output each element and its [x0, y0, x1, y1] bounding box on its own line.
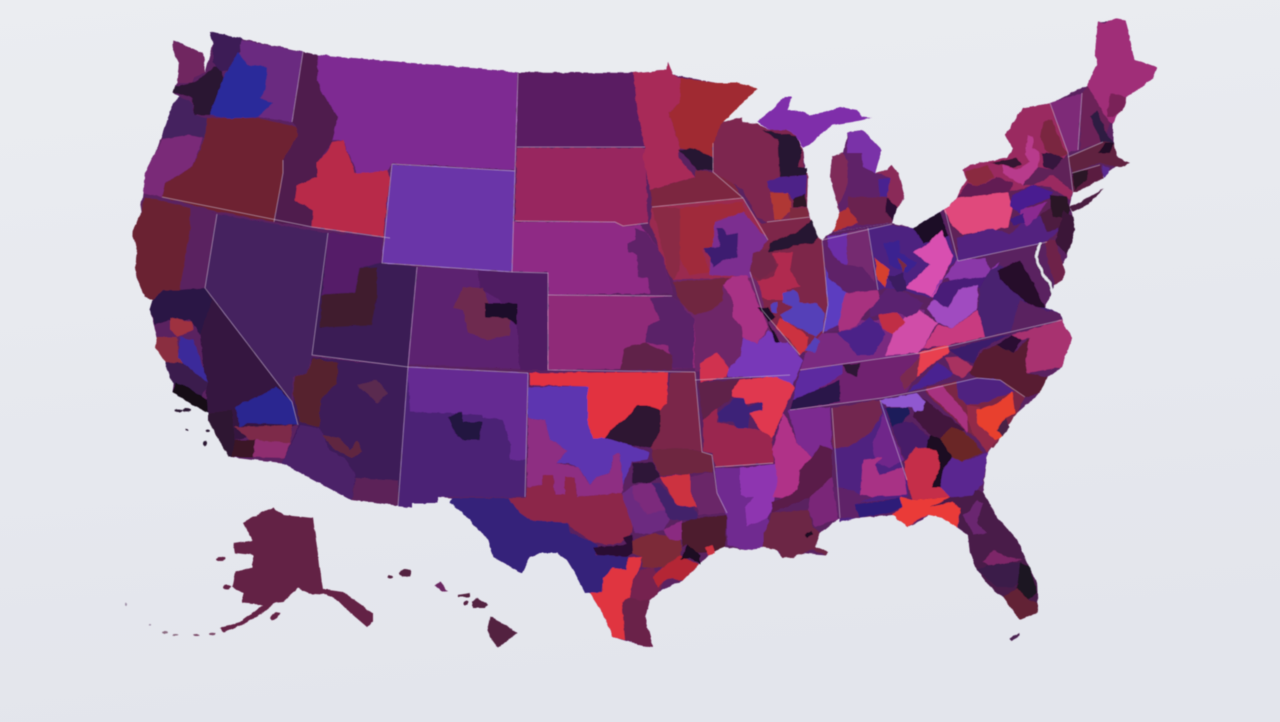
state borders [162, 52, 1103, 518]
state: North Dakota [517, 73, 645, 147]
state: South Carolina [925, 378, 1025, 452]
state: Louisiana [715, 464, 828, 558]
state: Idaho [274, 52, 390, 237]
state: Washington [173, 32, 303, 122]
state: Michigan lower peninsula [830, 130, 905, 232]
state: Montana [317, 55, 518, 173]
state: West Virginia [927, 258, 1000, 328]
state: Vermont [1050, 93, 1082, 153]
state: Virginia [923, 260, 1062, 348]
state: New Jersey [1055, 210, 1075, 255]
state: North Carolina [908, 320, 1072, 397]
state: Massachusetts [1068, 142, 1130, 173]
state: Kentucky [800, 288, 938, 370]
state: Nevada [205, 214, 328, 402]
state: Pennsylvania [945, 185, 1068, 261]
state: Arkansas [698, 375, 795, 467]
state: New Hampshire [1080, 85, 1113, 150]
state: Alaska [125, 508, 373, 636]
state: Indiana [822, 228, 880, 333]
state: South Dakota [515, 148, 648, 226]
state: Rhode Island [1102, 165, 1110, 178]
state: Illinois [750, 217, 828, 355]
state: Arizona [282, 357, 408, 506]
state: Tennessee [790, 353, 920, 410]
state: Kansas [548, 295, 695, 370]
state: Nebraska [512, 222, 673, 295]
state: New Mexico [398, 367, 528, 508]
state: Texas [450, 387, 727, 648]
state: California [132, 197, 298, 458]
state: Wisconsin [713, 117, 810, 222]
state: New York [957, 103, 1105, 217]
state: Florida [855, 490, 1038, 641]
state: Hawaii [387, 569, 517, 648]
state: Missouri [673, 275, 803, 385]
state: Utah [312, 233, 417, 367]
state: Oklahoma [530, 372, 702, 452]
state: Alabama [832, 400, 908, 522]
state: Connecticut [1072, 165, 1103, 192]
state: Oregon [143, 97, 298, 222]
state: Michigan upper peninsula [757, 97, 872, 148]
state: Maine [1087, 18, 1157, 123]
Chesapeake Bay [1036, 243, 1055, 300]
state: Ohio [868, 212, 957, 298]
state: Colorado [408, 267, 548, 370]
state: Wyoming [382, 164, 515, 272]
landmass base: contiguous United States [132, 20, 1157, 648]
islands: California Channel Islands [174, 408, 210, 446]
state: Georgia [880, 393, 988, 500]
state: Iowa [650, 198, 768, 280]
state: Mississippi [772, 407, 840, 527]
state: Delaware and Maryland [1045, 240, 1065, 285]
state: Minnesota [633, 62, 758, 207]
